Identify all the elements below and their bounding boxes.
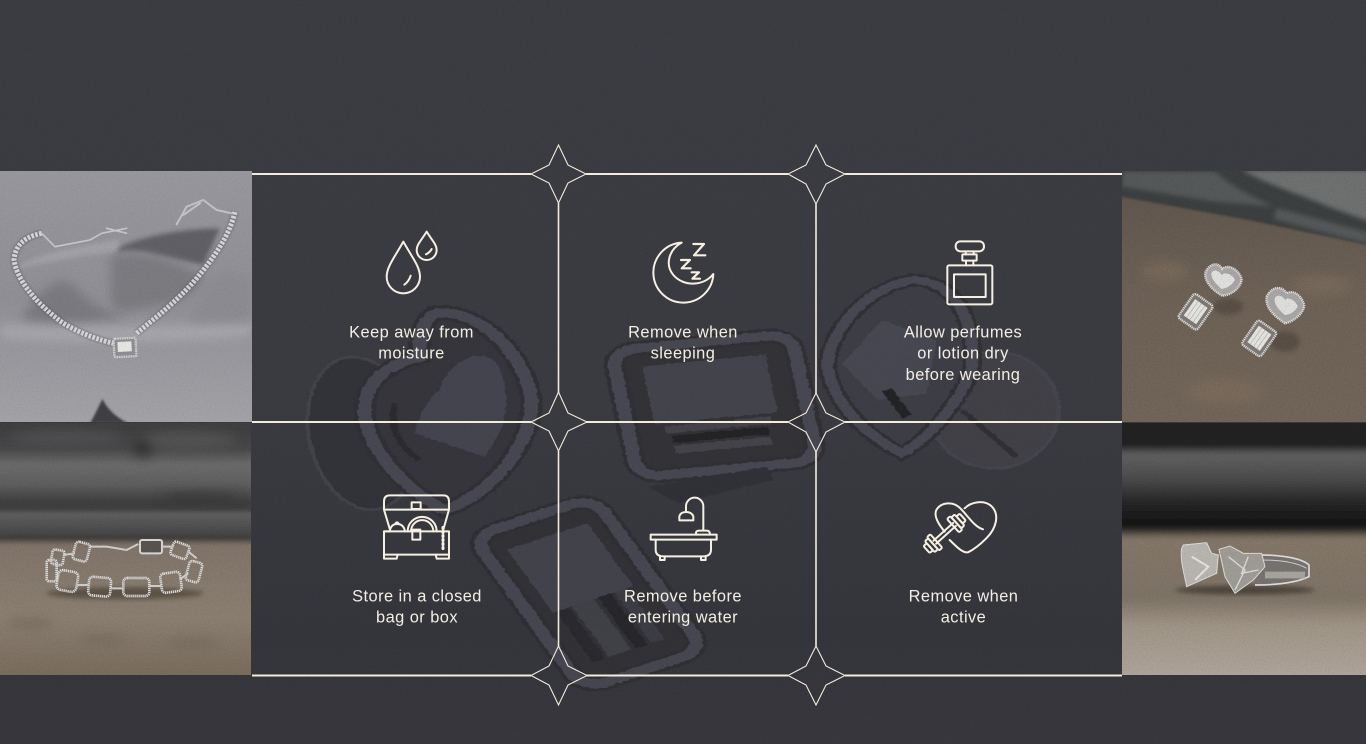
icon: jewellery chest <box>384 495 449 559</box>
tip: store in a closed bag or box <box>352 495 482 626</box>
photo: earrings on brown surface <box>1115 165 1366 422</box>
necklace stones <box>14 200 235 343</box>
label: sleeping: sleeping <box>651 344 715 362</box>
photo: necklace on grey cloth <box>0 171 252 423</box>
star bottom left <box>531 646 587 705</box>
ghosted earring watermark <box>297 280 1059 689</box>
ghost: heart stone right <box>827 280 1016 457</box>
label: perfumes: before wearing <box>906 366 1020 384</box>
star middle left <box>531 392 587 451</box>
label: moisture: moisture <box>378 344 445 362</box>
star ornaments <box>531 145 845 705</box>
star middle right <box>788 393 845 452</box>
icon: heart with dumbbell <box>921 502 996 556</box>
earring one <box>1178 264 1242 331</box>
label: perfumes: Allow perfumes <box>904 324 1022 342</box>
ghost: emerald stone lower <box>473 497 705 689</box>
tip: keep away from moisture <box>349 232 474 362</box>
label: store: bag or box <box>376 608 458 626</box>
icon: water drops <box>387 232 437 293</box>
photo: ring on brown surface <box>1122 423 1366 675</box>
tip: remove when sleeping <box>628 243 738 362</box>
bracelet links <box>47 541 203 597</box>
star bottom right <box>788 646 845 705</box>
ghost: bottom shadow <box>648 467 773 503</box>
label: water: Remove before <box>624 588 742 606</box>
label: sleeping: Remove when <box>628 324 738 342</box>
label: store: Store in a closed <box>352 588 482 606</box>
ghost: emerald stone upper <box>611 334 818 478</box>
ring stones <box>1181 543 1265 593</box>
earring two <box>1241 288 1304 357</box>
cloth <box>1122 171 1366 246</box>
ghost: earring back left <box>305 357 403 510</box>
ghost: heart stone left <box>365 313 531 510</box>
ghost: earring back right <box>929 352 1059 468</box>
label: active: active <box>941 608 986 626</box>
label: perfumes: or lotion dry <box>917 344 1009 362</box>
tip: remove when active <box>909 502 1018 626</box>
tip: remove before entering water <box>624 498 742 626</box>
icon: moon and zzz <box>653 243 713 303</box>
star top left <box>531 145 586 203</box>
label: water: entering water <box>628 608 738 626</box>
grid lines <box>252 174 1122 676</box>
label: moisture: Keep away from <box>349 324 474 342</box>
tip: allow perfumes to dry <box>904 241 1022 384</box>
icon: bathtub with shower <box>651 498 717 560</box>
ring band <box>1255 555 1309 585</box>
photo: bracelet on brown surface <box>0 424 251 675</box>
label: active: Remove when <box>909 588 1018 606</box>
star top right <box>788 145 845 204</box>
necklace pendant <box>114 338 136 357</box>
cloth mottling <box>26 431 228 498</box>
icon: perfume bottle <box>947 241 992 304</box>
cloth folds <box>0 228 252 423</box>
